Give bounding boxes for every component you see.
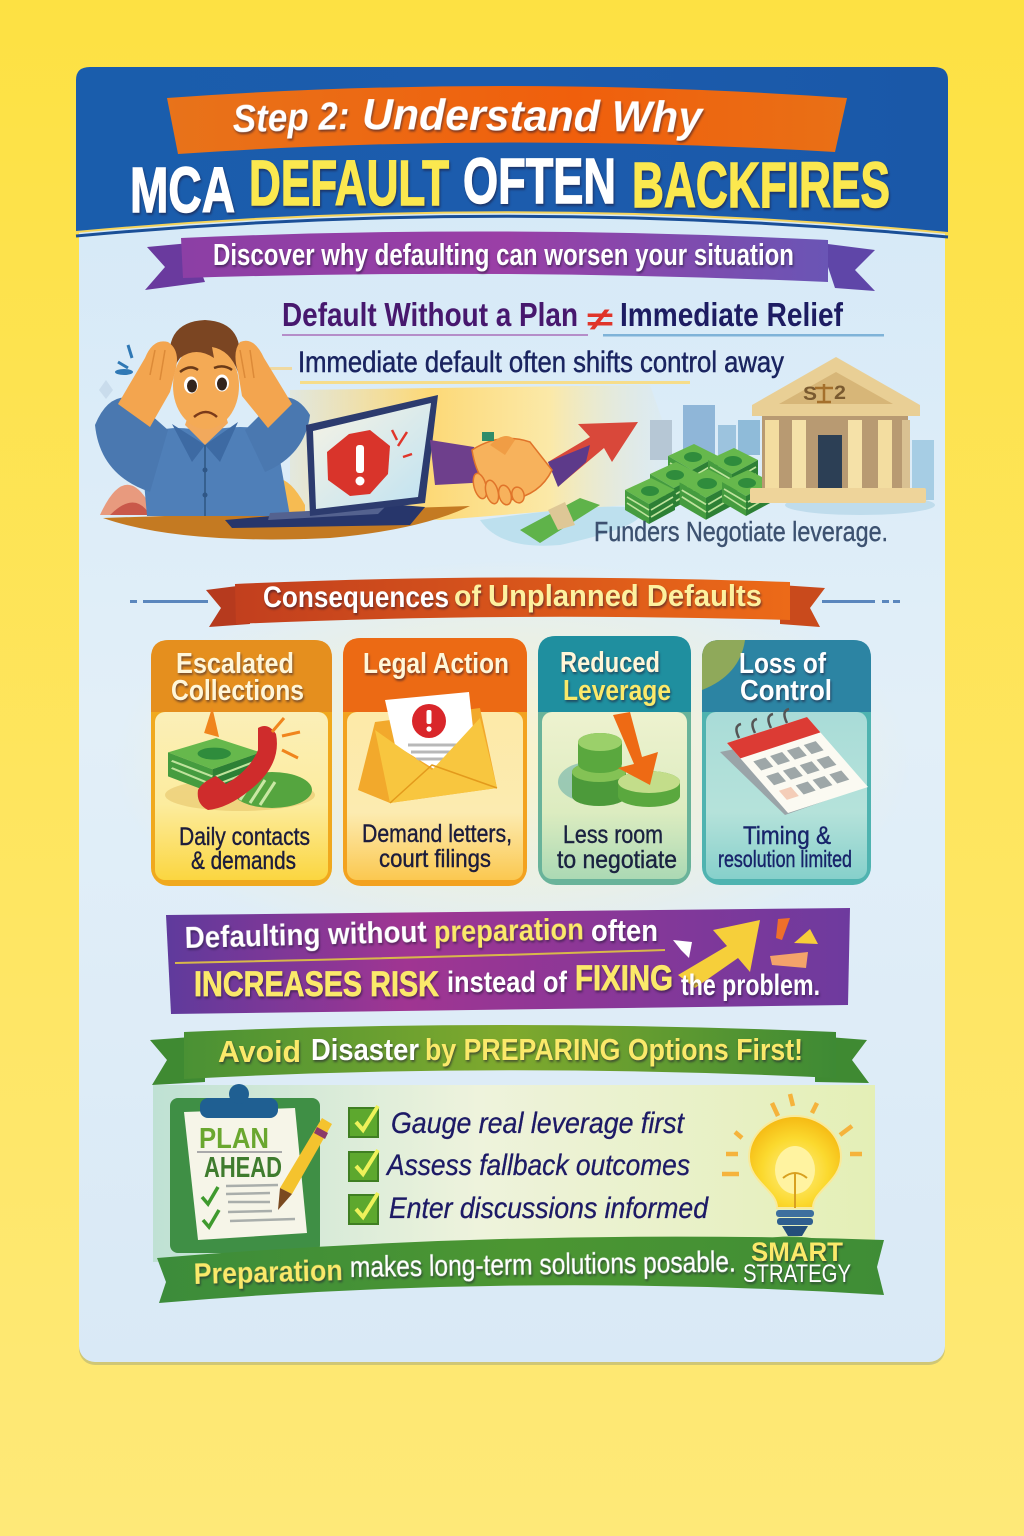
card: reduced leverage: to negotiate <box>557 846 677 874</box>
checklist item 3: Enter discussions informed <box>389 1192 709 1225</box>
icon: handshake and arrow <box>430 422 638 506</box>
icon: coins and down arrow <box>558 712 680 807</box>
icon: rising arrow and sparks <box>673 918 818 988</box>
main title: BACKFIRES <box>632 149 890 221</box>
card: escalated collections: Collections <box>171 675 304 707</box>
icon: calendar <box>720 709 868 815</box>
icon: money and phone <box>165 713 315 811</box>
warning banner <box>166 908 850 1014</box>
warning banner: instead of <box>447 966 568 999</box>
card: loss of control: Loss of <box>739 648 826 680</box>
main panel <box>79 72 945 1365</box>
card: legal action: court filings <box>379 845 491 873</box>
card: escalated collections: Escalated <box>176 648 294 680</box>
card: loss of control <box>702 640 871 885</box>
card: escalated collections: Daily contacts <box>179 823 310 851</box>
warning banner: INCREASES RISK <box>194 965 439 1004</box>
checklist <box>349 1106 709 1225</box>
subtitle ribbon <box>145 231 875 291</box>
subheading text: Immediate default often shifts control away <box>298 346 784 379</box>
consequences ribbon: Unplanned Defaults <box>488 578 762 613</box>
icon: bank building: S <box>803 384 817 405</box>
icon: bank building: 2 <box>834 383 846 404</box>
preparation panel <box>153 1085 875 1262</box>
icon: laptop with warning <box>225 395 438 528</box>
checklist item 2: Assess fallback outcomes <box>385 1149 690 1182</box>
main title: DEFAULT <box>249 147 449 219</box>
section divider dashes <box>130 600 900 603</box>
green top ribbon: by PREPARING Options First! <box>425 1032 803 1067</box>
consequences ribbon: of <box>454 580 482 613</box>
green top ribbon: Avoid <box>218 1034 301 1069</box>
card: legal action: Legal Action <box>363 648 509 680</box>
text: funders negotiate leverage: Funders Negotiate leverage. <box>594 516 888 547</box>
icon: plan ahead clipboard <box>170 1084 332 1253</box>
card: loss of control: Control <box>740 675 832 707</box>
icon: city skyline <box>650 405 934 500</box>
bottom ribbon: STRATEGY <box>743 1260 851 1288</box>
top ribbon: step title: Step 2: <box>232 95 350 141</box>
bottom ribbon: makes long-term solutions posable. <box>350 1246 736 1284</box>
icon: envelope with letter <box>358 692 497 803</box>
consequences ribbon: Consequences <box>263 581 449 614</box>
bottom ribbon: Preparation <box>193 1254 343 1291</box>
checklist item 1: Gauge real leverage first <box>391 1107 685 1140</box>
heading: default without a plan: ≠ <box>587 301 614 337</box>
card: loss of control: Timing & <box>743 822 831 850</box>
top ribbon: step title: Understand Why <box>362 90 705 142</box>
green top ribbon <box>150 1025 869 1085</box>
warning banner: Defaulting without <box>184 914 427 955</box>
icon: bank building <box>750 357 926 503</box>
card: reduced leverage <box>538 636 691 885</box>
icon: money pile <box>520 444 772 543</box>
card: escalated collections <box>151 640 332 886</box>
top ribbon: step title <box>167 86 847 154</box>
icon: light bulb <box>722 1094 862 1248</box>
main title <box>130 145 890 226</box>
warning banner: preparation <box>434 911 584 949</box>
icon: plan ahead clipboard: AHEAD <box>204 1152 282 1184</box>
card: reduced leverage: Leverage <box>563 675 671 707</box>
bottom ribbon: SMART <box>751 1237 843 1267</box>
main title: OFTEN <box>463 145 616 217</box>
card: reduced leverage: Reduced <box>560 647 660 679</box>
scene backdrop <box>100 385 935 546</box>
heading: default without a plan: Default Without a Plan <box>282 296 578 333</box>
green top ribbon: Disaster <box>311 1032 419 1067</box>
heading: default without a plan <box>282 296 884 337</box>
warning banner: often <box>591 913 658 948</box>
warning banner: FIXING <box>575 959 673 998</box>
header band <box>76 67 948 237</box>
card: legal action <box>343 638 527 886</box>
main title: MCA <box>130 154 235 226</box>
icon: stressed man <box>95 320 470 539</box>
consequences ribbon <box>206 577 825 627</box>
card: escalated collections: & demands <box>191 847 296 875</box>
icon: plan ahead clipboard: PLAN <box>199 1123 269 1155</box>
subtitle ribbon: Discover why defaulting can worsen your situation <box>213 237 794 272</box>
bottom ribbon <box>157 1237 884 1303</box>
card: reduced leverage: Less room <box>563 821 663 849</box>
card: legal action: Demand letters, <box>362 820 512 848</box>
heading: default without a plan: Immediate Relief <box>620 296 844 333</box>
card: loss of control: resolution limited <box>718 846 852 872</box>
warning banner: the problem. <box>681 969 820 1002</box>
